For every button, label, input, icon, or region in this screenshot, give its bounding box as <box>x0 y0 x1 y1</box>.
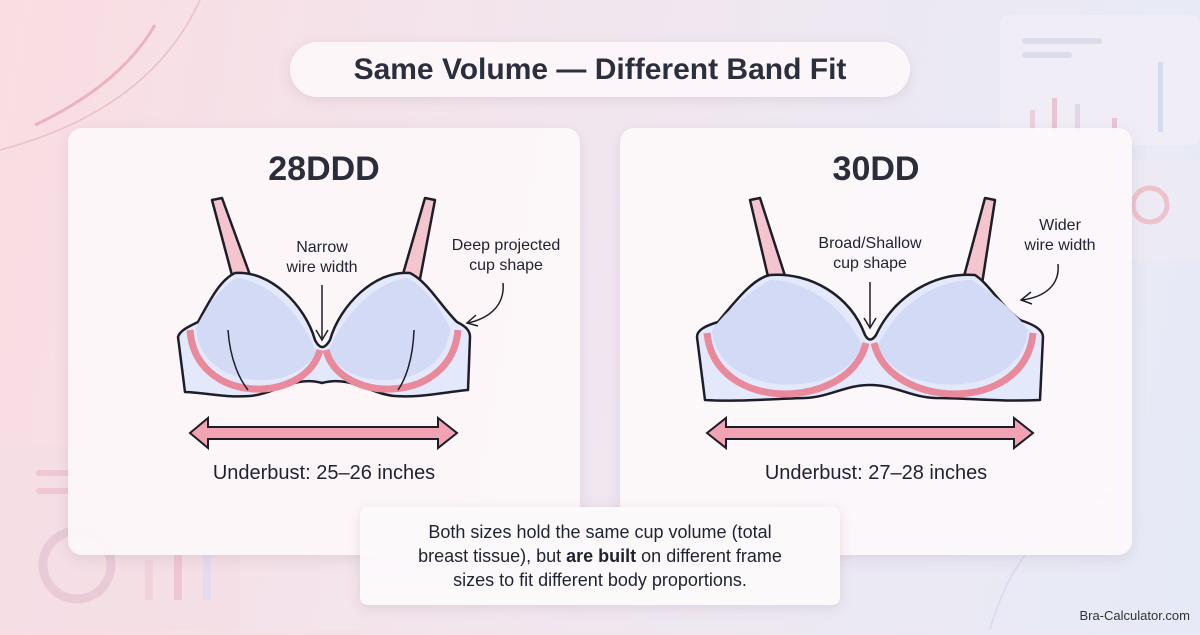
panel: 30DD <box>620 128 1132 555</box>
label: deep projected cup shape: Deep projected <box>452 237 560 254</box>
label: narrow wire width: Narrow <box>296 239 348 256</box>
label: broad/shallow cup shape <box>818 235 922 272</box>
label: broad/shallow cup shape: cup shape <box>833 255 907 272</box>
underbust text: Underbust: 25–26 inches <box>213 462 435 484</box>
panel: 28DDD <box>68 128 580 555</box>
callout: explanation: breast tissue), but are built on different frame <box>418 546 782 566</box>
bra illustration: 28DDD <box>176 196 504 450</box>
label: deep projected cup shape: cup shape <box>469 257 543 274</box>
callout: explanation: Both sizes hold the same cup volume (total <box>428 522 772 542</box>
title pill: Same Volume — Different Band Fit <box>354 53 846 86</box>
callout: explanation: sizes to fit different body proportions. <box>453 570 747 590</box>
callout: explanation <box>360 507 840 605</box>
label: deep projected cup shape <box>452 237 560 274</box>
title pill <box>290 42 910 97</box>
label: wider wire width: Wider <box>1039 217 1081 234</box>
label: narrow wire width <box>286 239 358 276</box>
footer: site name: Bra-Calculator.com <box>1079 608 1190 623</box>
heading: 28DDD: 28DDD <box>268 150 380 188</box>
label: broad/shallow cup shape: Broad/Shallow <box>818 235 922 252</box>
label: wider wire width: wire width <box>1024 237 1096 254</box>
heading: 30DD: 30DD <box>833 150 919 188</box>
label: wider wire width <box>1024 217 1096 254</box>
underbust text: Underbust: 27–28 inches <box>765 462 987 484</box>
bra illustration: 30DD <box>696 196 1059 450</box>
label: narrow wire width: wire width <box>286 259 358 276</box>
